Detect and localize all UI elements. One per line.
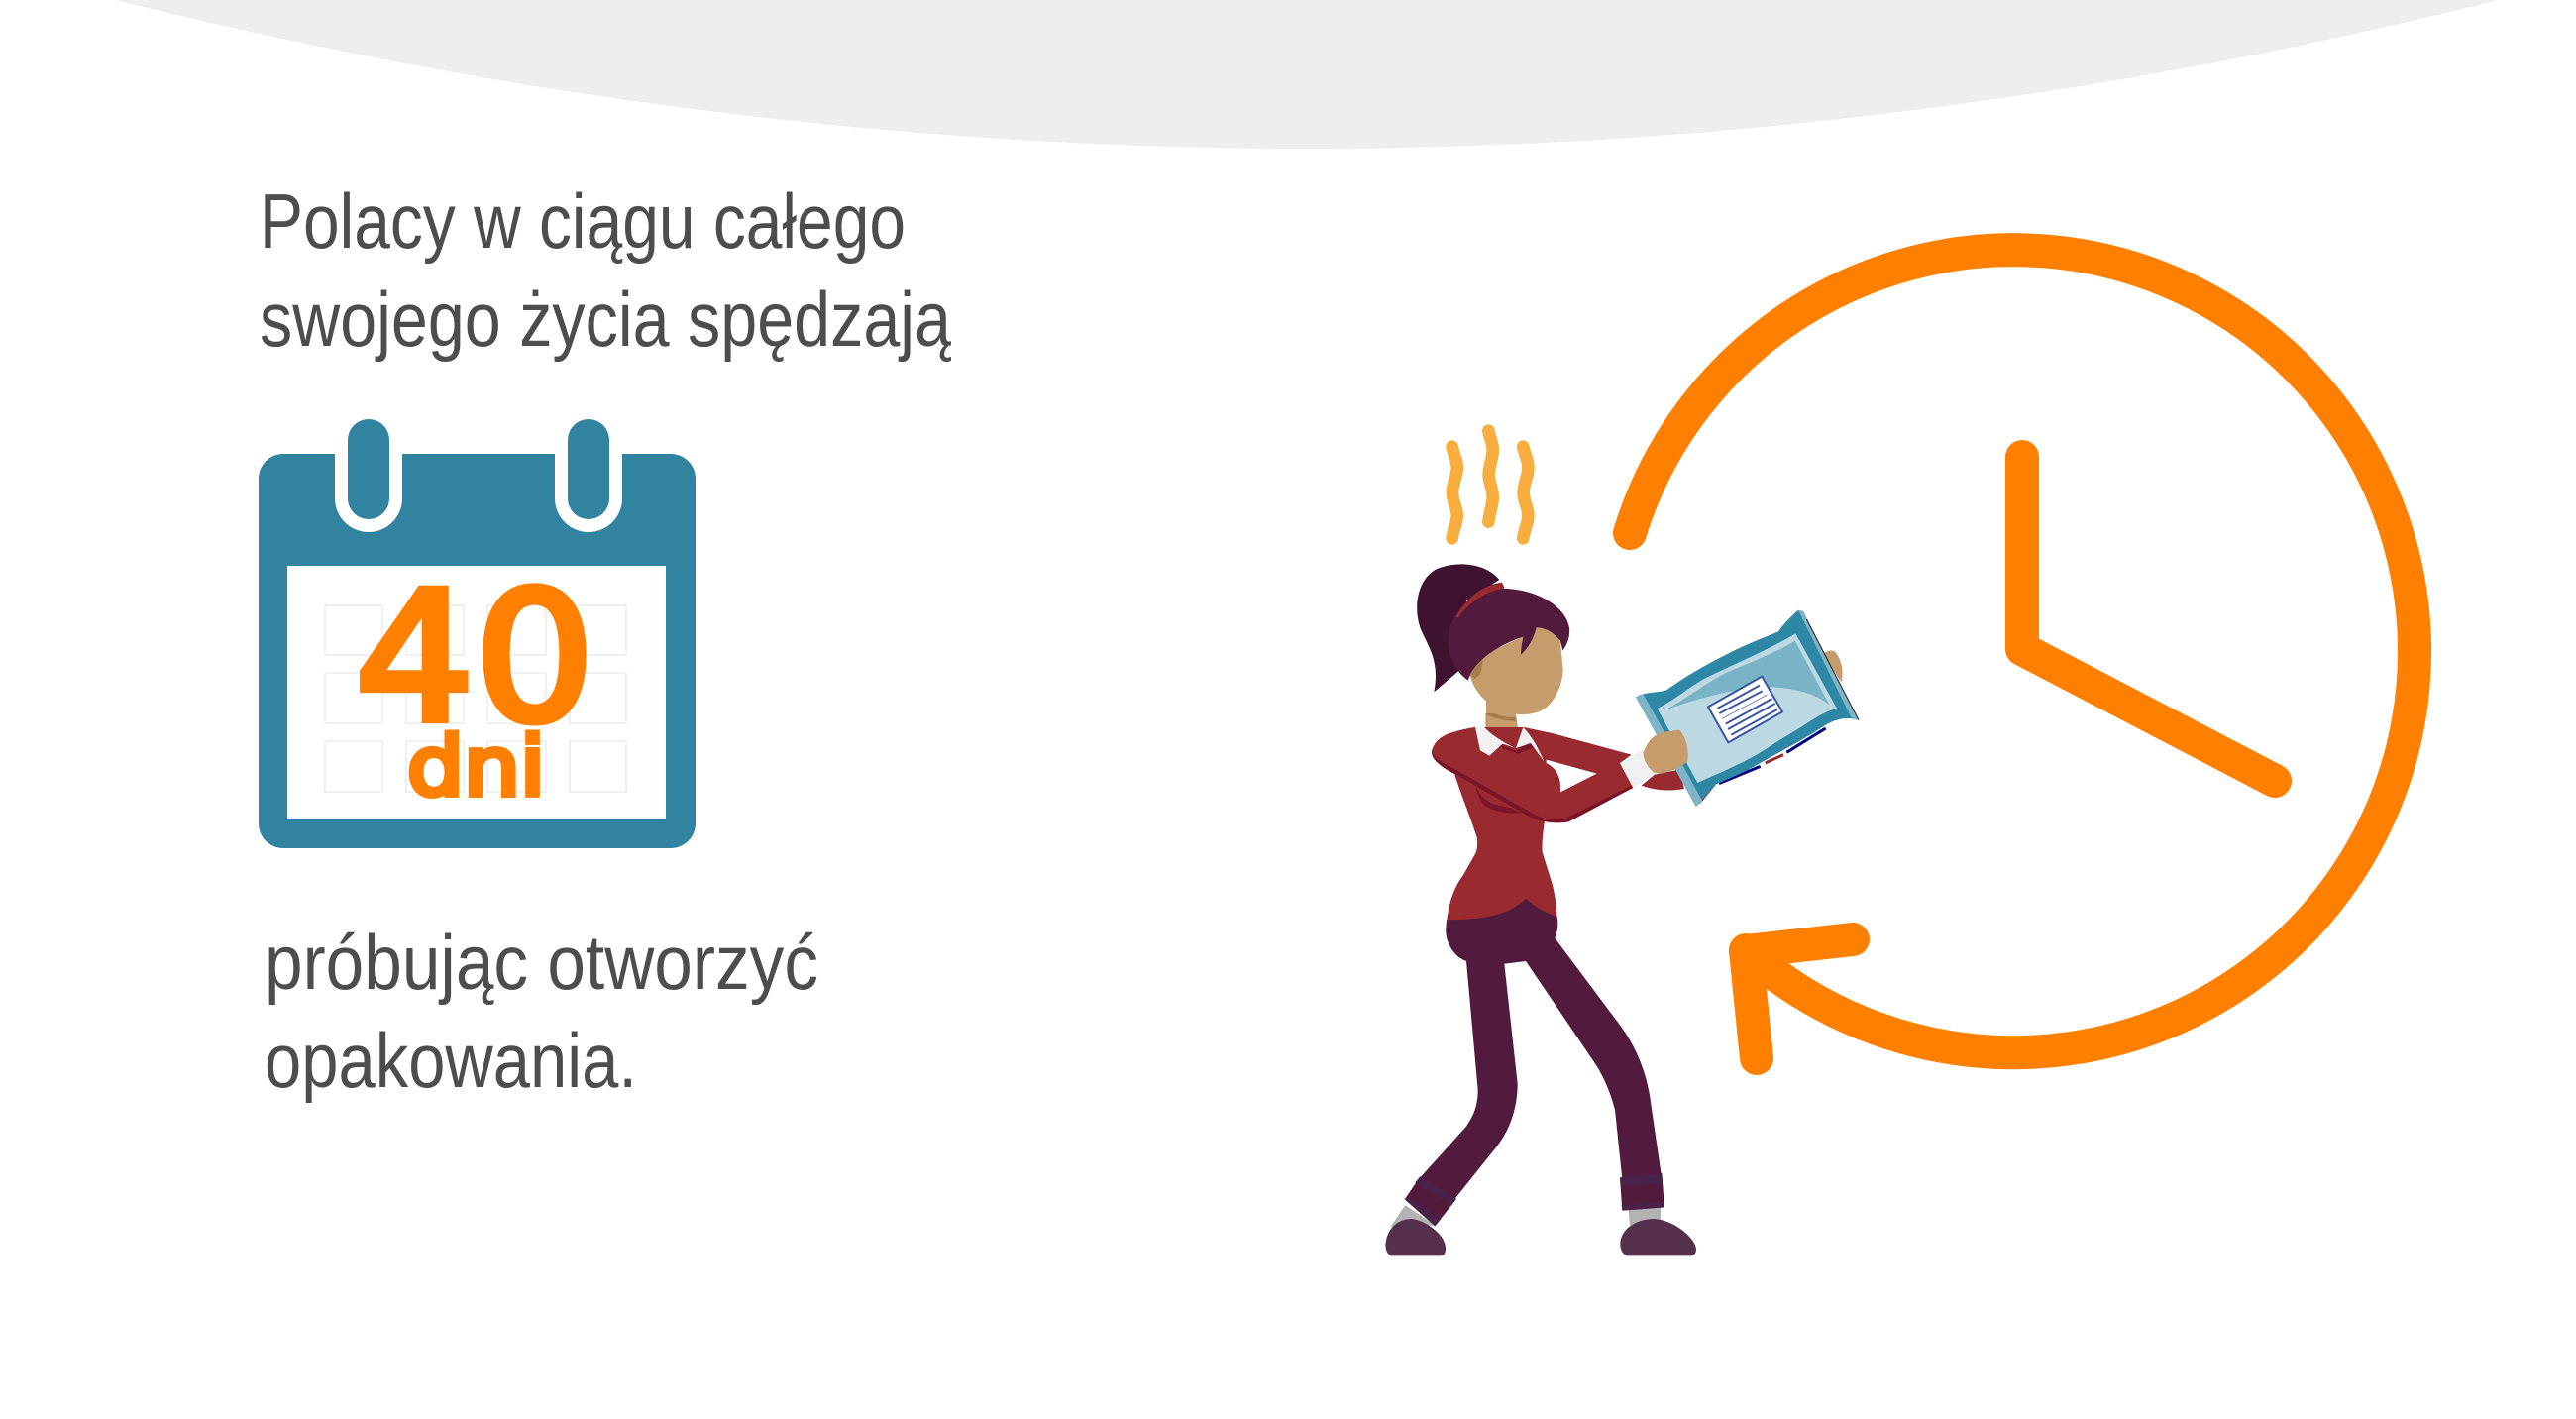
heading text: intro: swojego życia spędzają bbox=[260, 275, 952, 363]
crossed arm bbox=[1432, 727, 1633, 822]
trousers bbox=[1420, 899, 1662, 1199]
text: closing bbox=[265, 919, 818, 1104]
illustration: woman head bbox=[1417, 564, 1569, 748]
ponytail bbox=[1417, 564, 1499, 692]
illustration: woman legs bbox=[1385, 852, 1696, 1255]
illustration: package held in hands bbox=[1636, 610, 1859, 807]
package underside bbox=[1719, 728, 1826, 784]
underarm shadow bbox=[1475, 786, 1521, 813]
package label bbox=[1708, 677, 1782, 742]
socks bbox=[1390, 1205, 1435, 1227]
package body bbox=[1636, 610, 1859, 807]
heading text: intro: Polacy w ciągu całego bbox=[260, 177, 906, 265]
collar bbox=[1475, 727, 1516, 756]
shirt cuff bbox=[1620, 749, 1655, 788]
heading text: intro bbox=[260, 177, 952, 363]
shoes bbox=[1385, 1219, 1446, 1255]
hair band bbox=[1455, 583, 1505, 618]
face bbox=[1469, 627, 1563, 714]
icon: clock with circular arrow bbox=[1630, 250, 2415, 1058]
torso bbox=[1454, 775, 1546, 854]
neck base bbox=[1485, 713, 1518, 750]
icon: calendar with 40 dni: dni bbox=[407, 720, 545, 815]
near hand bbox=[1643, 730, 1688, 773]
illustration: woman upper body bbox=[1432, 713, 1655, 854]
cuffs bbox=[1405, 1176, 1456, 1226]
icon: calendar with 40 dni bbox=[259, 416, 696, 848]
icon: calendar with 40 dni: 40 bbox=[355, 555, 594, 762]
gap between arm and torso bbox=[1547, 760, 1597, 792]
arm shadow bbox=[1432, 751, 1633, 822]
far forearm bbox=[1642, 770, 1684, 791]
neck bbox=[1486, 701, 1519, 748]
sweater hem bbox=[1447, 852, 1557, 924]
text: closing: opakowania. bbox=[265, 1017, 637, 1104]
neck shadow bbox=[1486, 713, 1516, 721]
top grey arc background bbox=[115, 0, 2499, 149]
icon: stress waves bbox=[1452, 431, 1528, 538]
far hand bbox=[1823, 651, 1843, 682]
text: closing: próbując otworzyć bbox=[265, 919, 818, 1006]
hair bbox=[1449, 589, 1569, 681]
